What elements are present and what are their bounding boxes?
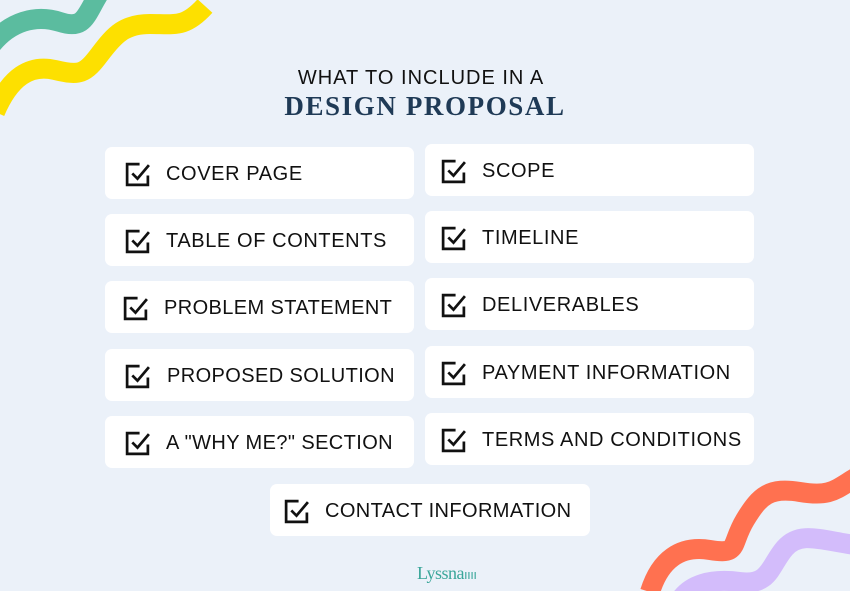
item: problem statement: PROBLEM STATEMENT bbox=[164, 297, 392, 319]
item: deliverables: DELIVERABLES bbox=[482, 294, 639, 316]
item: proposed solution: PROPOSED SOLUTION bbox=[167, 365, 395, 387]
item: why me bbox=[105, 416, 414, 468]
item: table of contents bbox=[105, 214, 414, 266]
item: scope bbox=[425, 144, 754, 196]
item: table of contents: TABLE OF CONTENTS bbox=[166, 230, 387, 252]
item: deliverables bbox=[425, 278, 754, 330]
item: cover page: COVER PAGE bbox=[166, 163, 303, 185]
logo: Lyssnaıııı bbox=[417, 563, 476, 583]
item: terms and conditions: TERMS AND CONDITIONS bbox=[482, 429, 742, 451]
item: proposed solution bbox=[105, 349, 414, 401]
item: payment information bbox=[425, 346, 754, 398]
item: contact information: CONTACT INFORMATION bbox=[325, 500, 571, 522]
item: payment information: PAYMENT INFORMATION bbox=[482, 362, 731, 384]
item: cover page bbox=[105, 147, 414, 199]
title bbox=[284, 67, 566, 121]
item: terms and conditions bbox=[425, 413, 754, 465]
item: contact information bbox=[270, 484, 590, 536]
item: timeline bbox=[425, 211, 754, 263]
item: scope: SCOPE bbox=[482, 160, 555, 182]
item: problem statement bbox=[105, 281, 414, 333]
item: timeline: TIMELINE bbox=[482, 227, 579, 249]
item: why me: A "WHY ME?" SECTION bbox=[166, 432, 393, 454]
title: WHAT TO INCLUDE IN A bbox=[298, 67, 544, 89]
title: DESIGN PROPOSAL bbox=[284, 91, 566, 121]
